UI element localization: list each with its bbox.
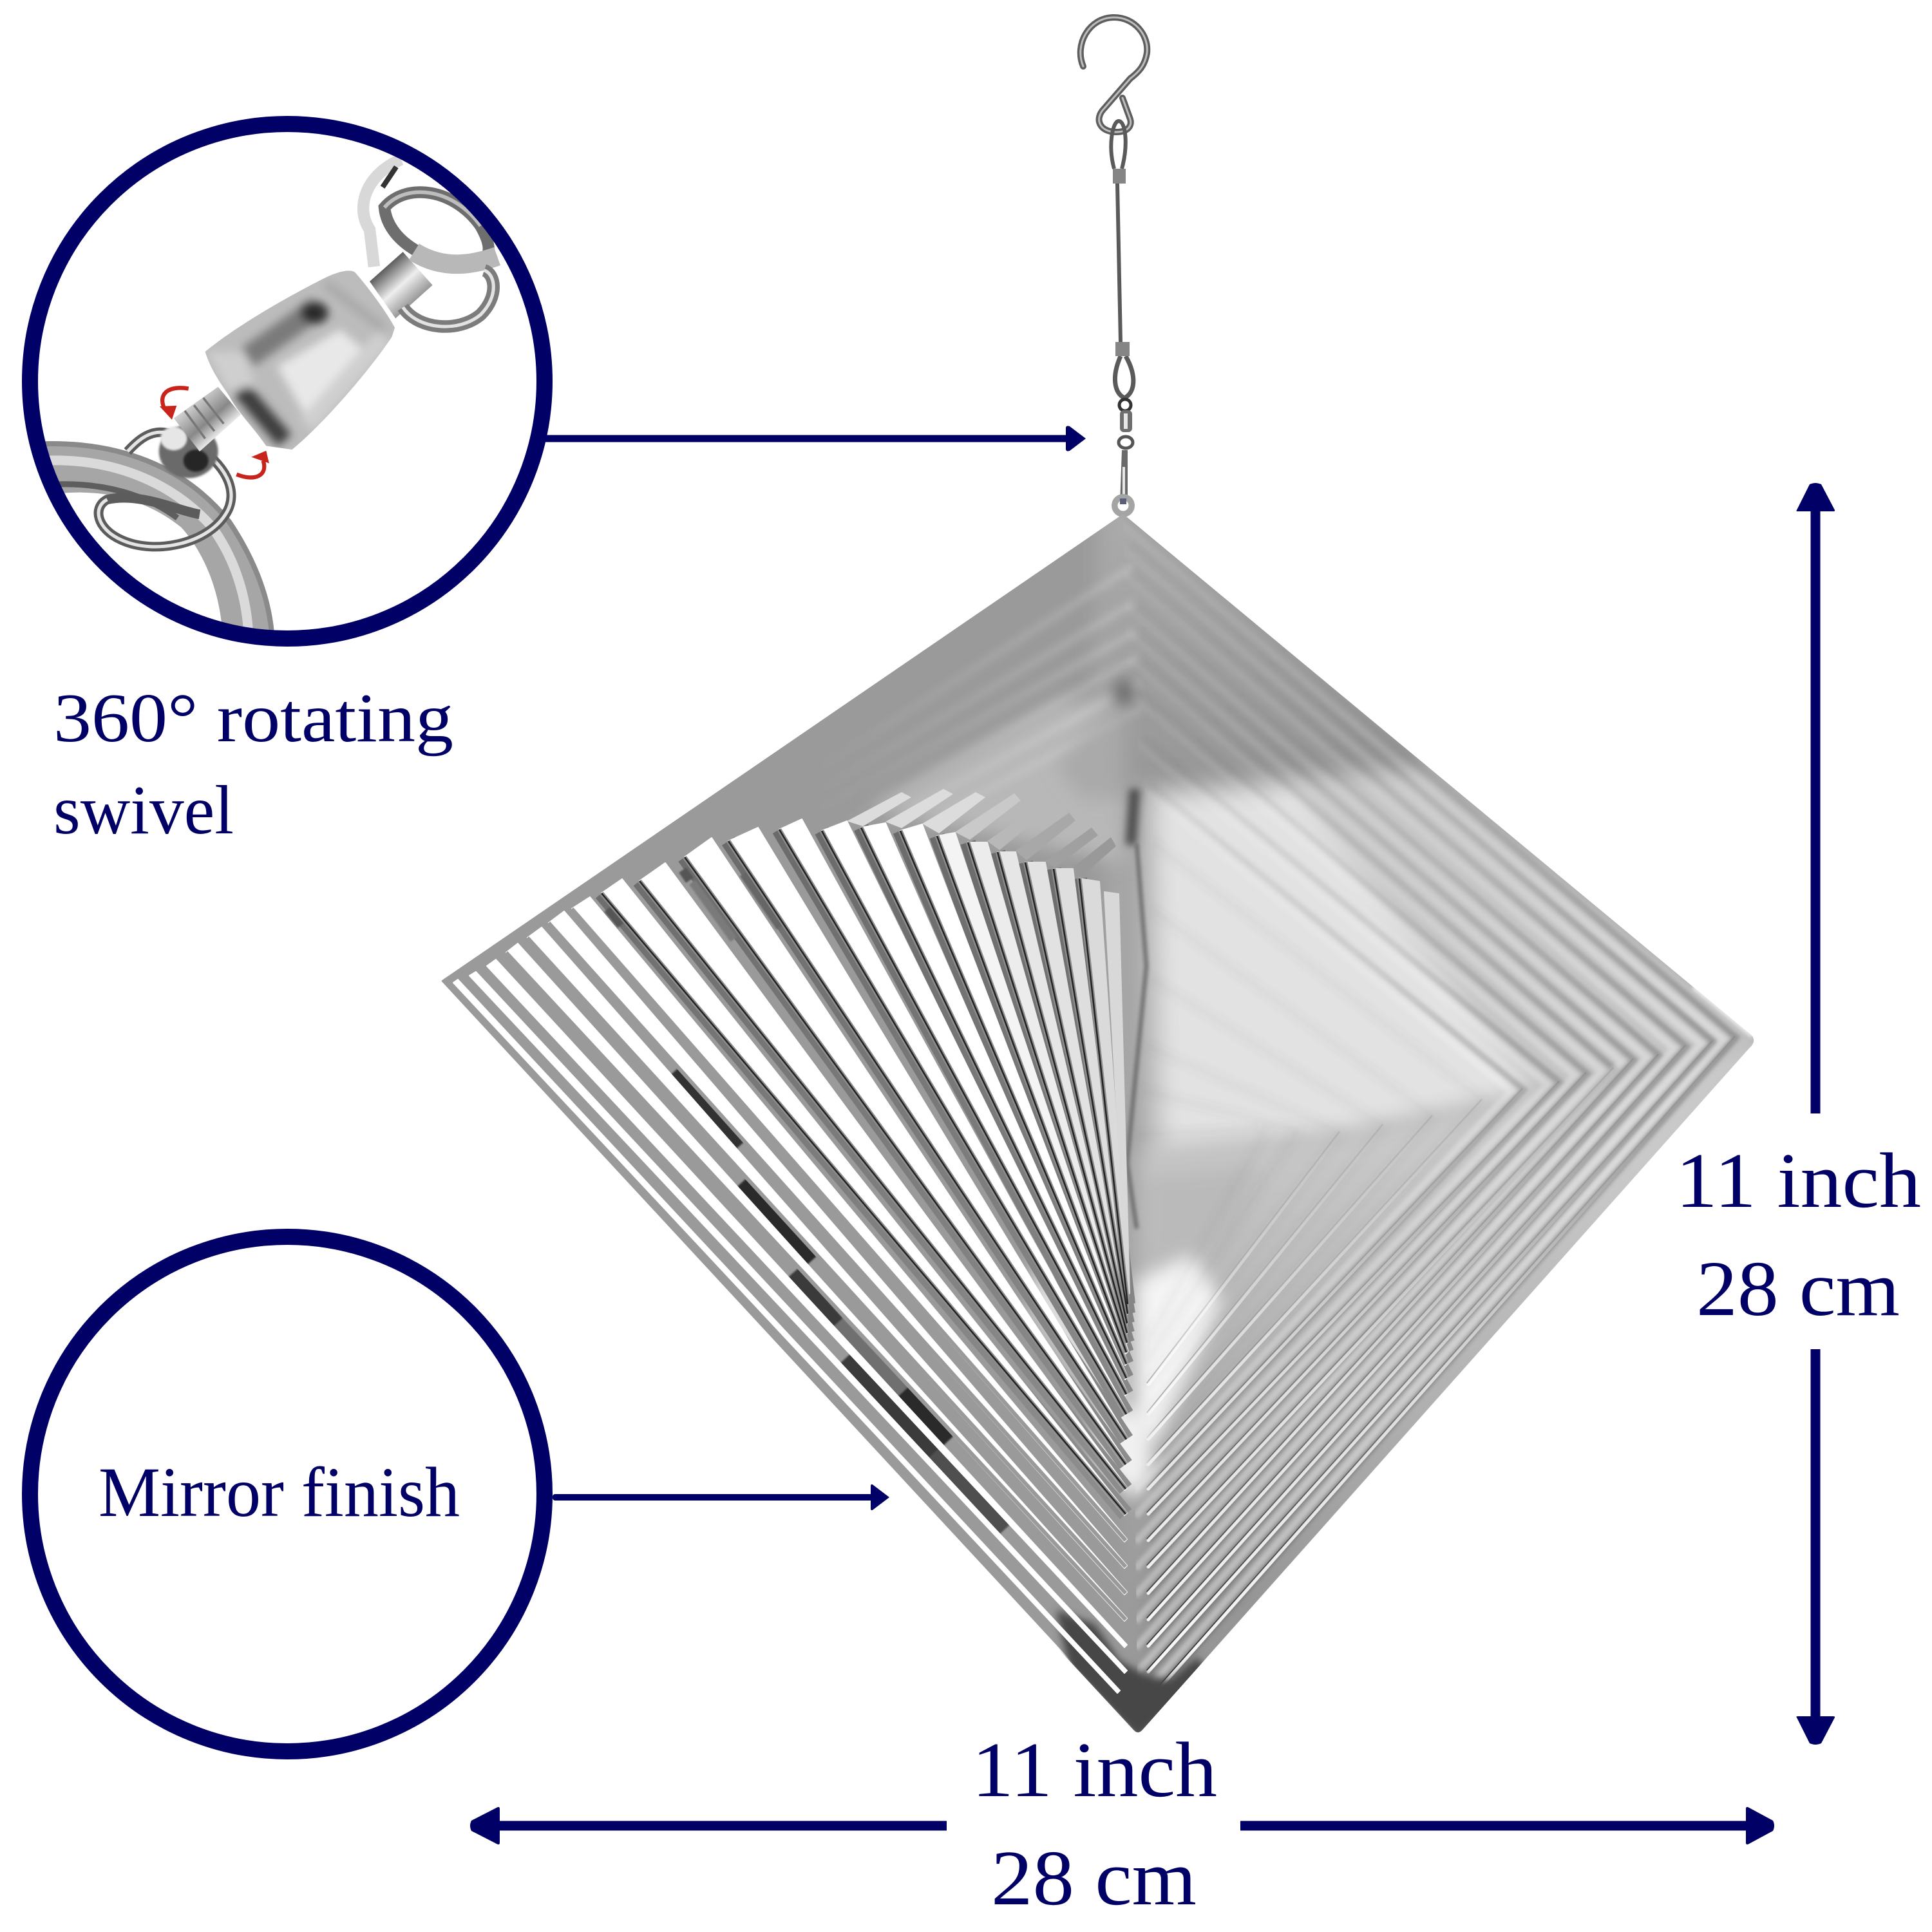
strip dark edges (601, 828, 1128, 1514)
diamond spinner (441, 489, 1777, 1752)
tip glint (1694, 987, 1753, 1036)
height label: 11 inch (1676, 1137, 1921, 1224)
neck (370, 252, 433, 318)
threaded eye (159, 425, 218, 478)
strip widening (601, 828, 1128, 1514)
outer strip widening (506, 909, 1126, 1620)
cable and loops (1111, 121, 1133, 398)
right face, blurred reflections (1095, 489, 1777, 1752)
s hook (1081, 17, 1147, 132)
metal base (441, 514, 1756, 1733)
width arrow right (1240, 1807, 1774, 1844)
arrow: mirror finish callout (553, 1484, 889, 1510)
label: 360 rotating swivel (53, 680, 453, 849)
lower right slot shadows (1147, 1036, 1735, 1690)
height label: 28 cm (1696, 1245, 1900, 1332)
big key ring (37, 444, 272, 632)
width arrow left (470, 1807, 947, 1844)
height arrow down (1796, 1349, 1835, 1745)
barrel body (185, 260, 406, 459)
width label top: 11 inch (972, 1727, 1217, 1814)
lower right slots (1148, 1037, 1736, 1692)
dimension: height (1676, 483, 1921, 1745)
chevron stripes, light (1113, 518, 1723, 1694)
hanging hardware (1081, 17, 1147, 517)
inner chevrons, faint (1135, 841, 1483, 1464)
circle outline (30, 124, 545, 639)
small swivel (1119, 399, 1133, 504)
bottom dark tip (1056, 1610, 1211, 1739)
inner fan shading (1056, 679, 1146, 1229)
height label (1676, 1137, 1921, 1332)
cable ferrules (1113, 169, 1130, 356)
red rotation arrows (162, 388, 264, 477)
mirror streaks (607, 870, 1005, 1530)
mounting tab (1112, 494, 1135, 517)
upper rings (363, 160, 497, 327)
left arm reflections (869, 696, 1153, 1501)
inner slot top arms (847, 789, 1116, 877)
split ring, lower (99, 432, 231, 547)
left arm streaks (712, 567, 1141, 838)
dimension: width (470, 1727, 1774, 1922)
label: 360 rotating swivel: swivel (53, 772, 234, 849)
circle: swivel detail (30, 124, 545, 639)
label: 360 rotating swivel: 360° rotating (53, 680, 453, 757)
height arrow up (1796, 483, 1835, 1113)
swivel photo illustration (37, 160, 497, 632)
chevron stripes, dark (1126, 516, 1736, 1692)
left slots, white (453, 819, 1128, 1693)
arrow: swivel callout (545, 426, 1086, 451)
mirror finish label: Mirror finish (99, 1453, 460, 1531)
left slots, inner light (937, 833, 1130, 1354)
strip shading (601, 828, 1128, 1514)
threads (185, 398, 223, 439)
circle: mirror finish (30, 1236, 545, 1752)
width label bottom: 28 cm (991, 1835, 1197, 1922)
